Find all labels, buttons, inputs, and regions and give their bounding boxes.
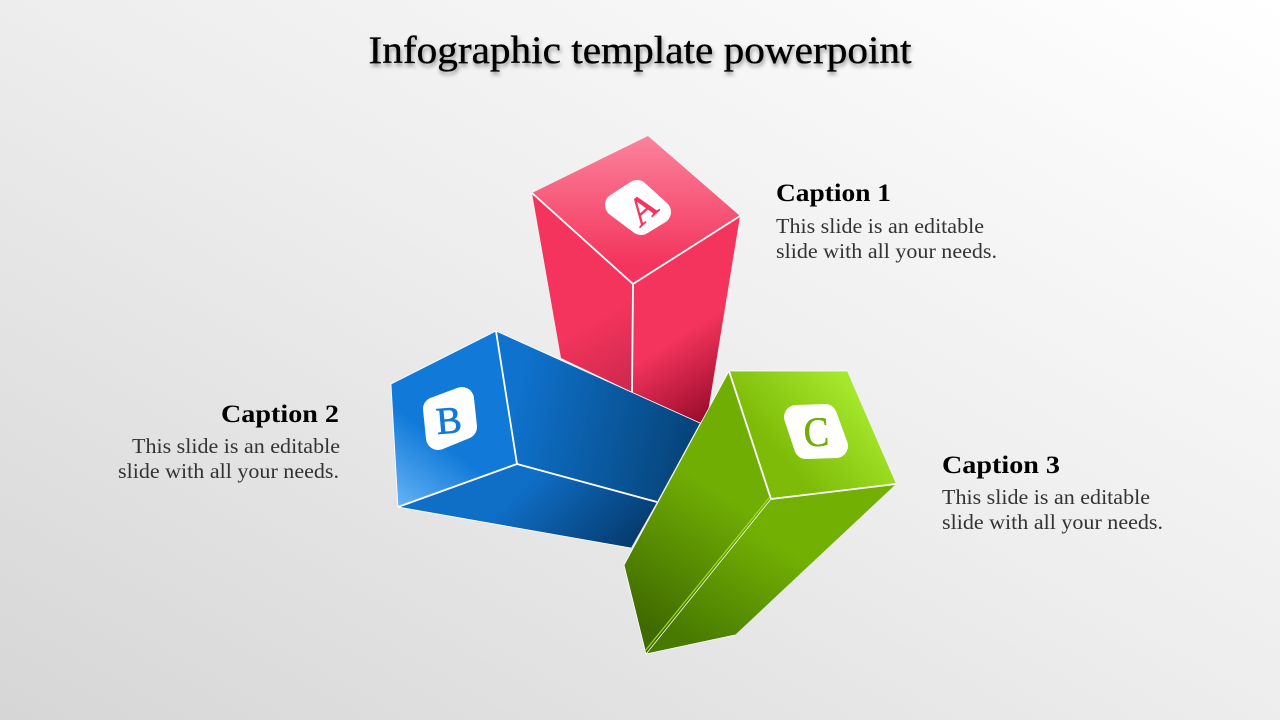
caption 2: slide with all your needs. (118, 459, 339, 483)
blue column front face (391, 331, 517, 507)
caption 1 (776, 180, 997, 263)
green column left face (624, 371, 771, 654)
red column left face (532, 193, 633, 392)
green column front face (729, 371, 896, 499)
badge C (796, 408, 836, 456)
blue column lower face (398, 464, 657, 548)
caption 1: Caption 1 (776, 180, 891, 207)
caption 3: Caption 3 (942, 452, 1060, 479)
blue column B (391, 331, 700, 548)
caption 2 (118, 401, 340, 483)
badge B: B (434, 399, 463, 443)
badge A: A (621, 182, 666, 236)
badge C: C (802, 408, 830, 456)
red column A (532, 136, 740, 423)
caption 3 (942, 452, 1163, 534)
red column top face (532, 136, 740, 284)
green column right face (646, 484, 896, 654)
caption 2: Caption 2 (221, 401, 339, 428)
green column C (624, 371, 896, 654)
caption 2: This slide is an editable (132, 434, 340, 458)
red column right face (632, 216, 740, 423)
title: Infographic template powerpoint (368, 29, 912, 72)
caption 3: slide with all your needs. (942, 510, 1163, 534)
caption 1: This slide is an editable (776, 214, 984, 238)
caption 3: This slide is an editable (942, 485, 1150, 509)
blue column upper face (496, 331, 700, 502)
caption 1: slide with all your needs. (776, 239, 997, 263)
